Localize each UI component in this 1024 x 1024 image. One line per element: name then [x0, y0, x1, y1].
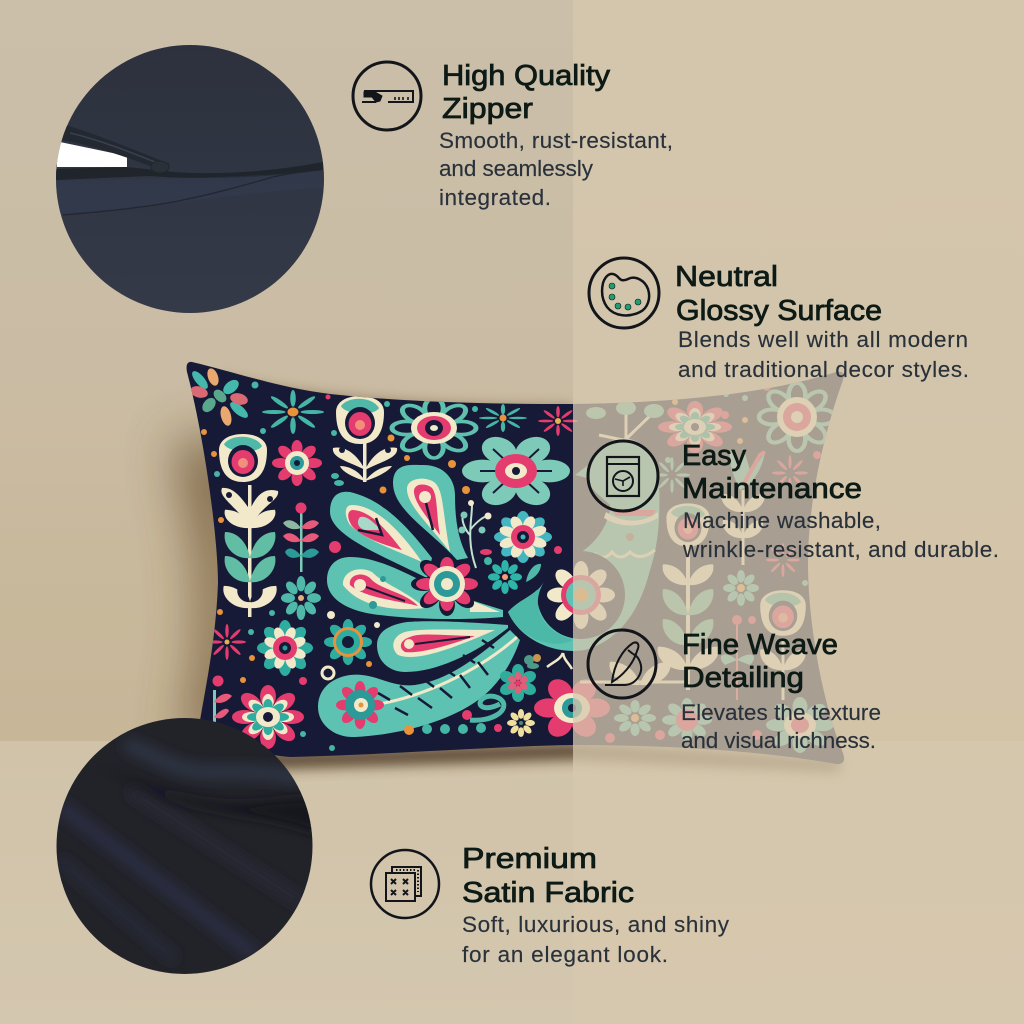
- small blob: [524, 654, 541, 669]
- orange ring flower: [324, 619, 372, 665]
- feather third: [327, 557, 503, 619]
- peacock pillow: [180, 355, 850, 770]
- pillow side shadow: [175, 440, 240, 741]
- top tulip plant: [333, 396, 397, 482]
- callout: zipper: [353, 60, 673, 210]
- text: satin description: [462, 912, 730, 967]
- thin sprig: [458, 500, 492, 568]
- callout: easy maintenance: [588, 440, 999, 562]
- feather top: [393, 465, 468, 560]
- feather fifth: [318, 630, 520, 737]
- text: zipper description: and seamlessly: [439, 156, 594, 181]
- icon: needle and thread: [588, 630, 656, 698]
- heading: Neutral Glossy Surface: [675, 261, 882, 327]
- text: glossy description: [678, 327, 969, 382]
- small pink sprig flower: [212, 624, 246, 660]
- heading: Neutral Glossy Surface: Neutral: [675, 261, 778, 293]
- small mixed flower: [281, 576, 321, 620]
- small teal flower: [479, 404, 527, 432]
- text: weave description: and visual richness.: [681, 728, 876, 753]
- small pink flower: [538, 406, 578, 436]
- teal sprig flower: [262, 390, 324, 434]
- text: satin description: Soft, luxurious, and shiny: [462, 912, 730, 937]
- heading: Easy Maintenance: Maintenance: [682, 473, 862, 505]
- large teal flower: [462, 436, 570, 506]
- small mixed flower near body: [488, 560, 522, 594]
- feather second: [330, 492, 432, 578]
- heading: Premium Satin Fabric: Premium: [462, 843, 597, 875]
- teal ring flower: [392, 398, 476, 458]
- callout: fine weave: [588, 629, 881, 753]
- heading: Fine Weave Detailing: Fine Weave: [682, 629, 838, 661]
- text: glossy description: and traditional decor styles.: [678, 357, 969, 382]
- teal leaf: [526, 564, 541, 582]
- text: maintenance description: wrinkle-resistant, and durable.: [682, 537, 999, 562]
- pink flower: [272, 440, 322, 486]
- heading: Premium Satin Fabric: [462, 843, 634, 909]
- pillow top shadow: [220, 375, 573, 420]
- heading: Neutral Glossy Surface: Glossy Surface: [676, 295, 882, 327]
- icon: palette: [589, 258, 659, 328]
- background wall: [0, 0, 1024, 741]
- small pink stem: [283, 502, 319, 572]
- heading: Fine Weave Detailing: Detailing: [682, 662, 804, 694]
- translucent right panel: [573, 0, 1024, 1024]
- text: zipper description: [439, 128, 673, 210]
- white petal flower: [494, 511, 552, 563]
- patterned dots: [201, 382, 562, 751]
- small cream flower: [507, 709, 535, 737]
- text: maintenance description: [682, 508, 999, 562]
- callout: satin fabric: [371, 843, 730, 967]
- feather fourth: [377, 621, 508, 672]
- pink bottom flower: [534, 679, 610, 737]
- circle: zipper close-up: [50, 40, 330, 320]
- right side pattern under overlay: [580, 383, 835, 753]
- heading: Premium Satin Fabric: Satin Fabric: [462, 877, 634, 909]
- small flower cluster: [500, 664, 536, 702]
- heading: Fine Weave Detailing: [682, 629, 838, 694]
- text: weave description: Elevates the texture: [681, 700, 881, 725]
- heading: High Quality Zipper: High Quality: [442, 60, 611, 92]
- heading: Easy Maintenance: [682, 440, 862, 505]
- cream flower: [256, 619, 314, 677]
- icon: cushions: [371, 850, 439, 918]
- text: zipper description: Smooth, rust-resistant,: [439, 128, 673, 153]
- heading: Easy Maintenance: Easy: [682, 440, 746, 472]
- bottom left stem: [212, 676, 232, 722]
- top left petal flower: [191, 368, 248, 426]
- heading: High Quality Zipper: Zipper: [442, 93, 533, 125]
- text: glossy description: Blends well with all modern: [678, 327, 968, 352]
- bottom left flower: [232, 685, 304, 749]
- text: weave description: [681, 700, 881, 753]
- heading: High Quality Zipper: [442, 60, 611, 125]
- pillow bottom shadow: [260, 742, 840, 772]
- icon: zipper: [353, 62, 421, 130]
- text: maintenance description: Machine washable,: [683, 508, 881, 533]
- text: satin description: for an elegant look.: [462, 942, 668, 967]
- left tulip plant: [219, 434, 278, 617]
- sofa surface: [0, 741, 1024, 1024]
- text: zipper description: integrated.: [439, 185, 551, 210]
- bottom curl: [470, 696, 504, 720]
- circle: satin fabric close-up: [56, 718, 312, 974]
- central feather flower: [411, 552, 483, 616]
- peacock body: [508, 401, 664, 669]
- callout: glossy surface: [589, 258, 969, 382]
- icon: washing machine: [588, 441, 658, 511]
